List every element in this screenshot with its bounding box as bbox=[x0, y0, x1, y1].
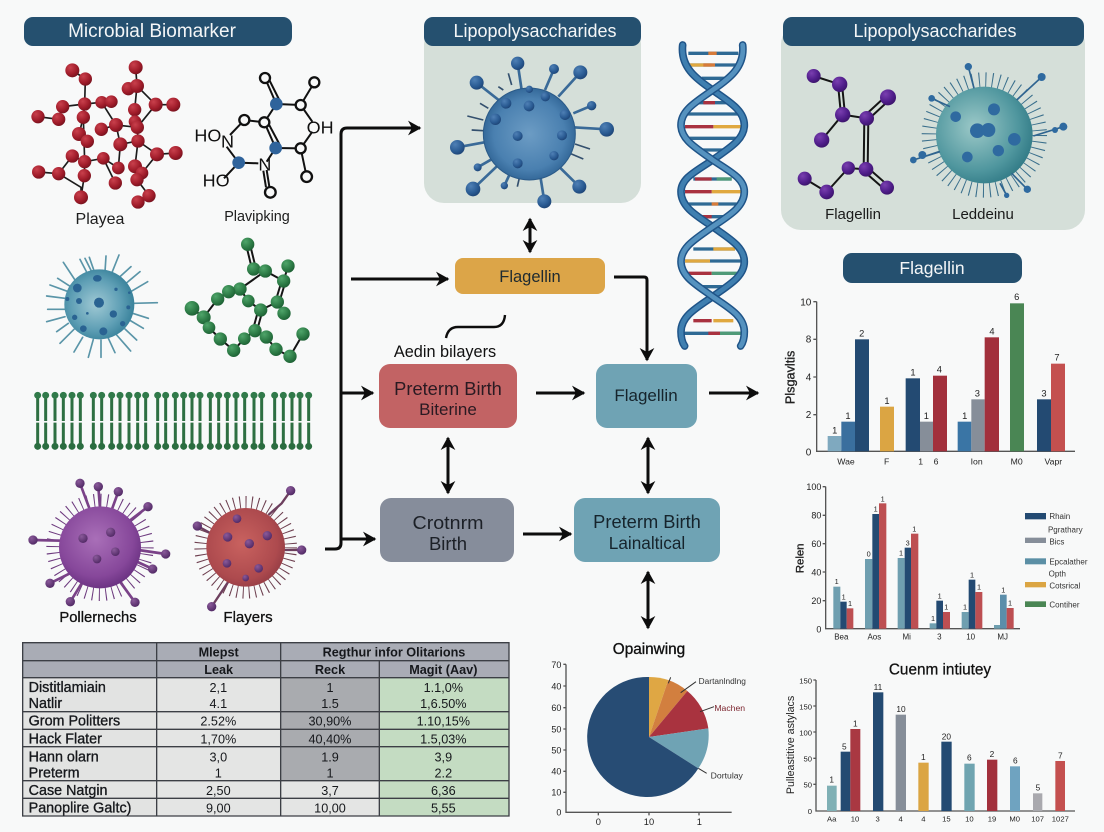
bracket: Aedin bilayers leader bbox=[446, 315, 505, 338]
flow box: Preterm Birth Lainaltical bbox=[574, 498, 720, 562]
label: Playea: Playea bbox=[76, 211, 125, 228]
bar chart: Relen: 1 bbox=[970, 570, 974, 579]
bar chart: Relen: 1 bbox=[944, 603, 948, 612]
data table: 3,7 bbox=[321, 784, 339, 798]
icon: teal microbe bbox=[47, 255, 157, 357]
bar chart: Flagellin: 4 bbox=[806, 372, 812, 383]
icon: chemical structure: N bbox=[258, 155, 271, 175]
flow box: Crotnrm Birth grey: Birth bbox=[429, 533, 467, 554]
arrow: double, panel to Flagellin bbox=[528, 219, 532, 252]
icon: purple molecule bbox=[798, 69, 896, 199]
pie chart: Opainwing: 50 bbox=[551, 724, 561, 734]
data table: Natlir bbox=[29, 696, 62, 712]
bar chart: Relen: 80 bbox=[811, 511, 821, 521]
bar chart: Relen: 1 bbox=[931, 614, 935, 623]
icon: red microbe bbox=[193, 486, 306, 611]
bar chart: Relen: 3 bbox=[937, 632, 942, 641]
icon: purple microbe bbox=[28, 479, 170, 607]
bar chart: Relen: Mi bbox=[902, 632, 911, 641]
bar chart: Flagellin: 4 bbox=[937, 365, 942, 375]
bar chart: Cuenm intiutey: 11 bbox=[874, 682, 883, 692]
flow box: Preterm Birth Lainaltical: Lainaltical bbox=[609, 533, 685, 553]
legend: Relen chart: Epcalather bbox=[1049, 557, 1088, 566]
data table: 6,36 bbox=[431, 784, 456, 798]
bar chart: Flagellin: 2 bbox=[859, 329, 864, 339]
bar chart: Cuenm intiutey: Cuenm intiutey bbox=[889, 662, 991, 679]
flow box: Flagellin teal: Flagellin bbox=[614, 386, 678, 405]
bar chart: Relen: Aos bbox=[867, 632, 881, 641]
legend: Relen chart: Contiher bbox=[1049, 600, 1080, 609]
bar chart: Relen: 20 bbox=[811, 596, 821, 606]
heading: right Lipopolysaccharides bbox=[783, 17, 1084, 46]
bar chart: Flagellin: Vapr bbox=[1045, 457, 1062, 467]
bar chart: Cuenm intiutey: 10 bbox=[896, 704, 906, 714]
data table: 30,90% bbox=[309, 714, 351, 728]
bar chart: Cuenm intiutey bbox=[785, 662, 1075, 823]
data table: 2,1 bbox=[210, 681, 227, 695]
bar chart: Flagellin: 6 bbox=[934, 457, 939, 467]
data table: 1 bbox=[326, 766, 334, 780]
label: Plavipking: Plavipking bbox=[224, 209, 290, 225]
data table: 40,40% bbox=[309, 732, 351, 746]
data table: 1.5 bbox=[321, 697, 339, 711]
bar chart: Cuenm intiutey: 10 bbox=[965, 814, 974, 823]
bar chart: Flagellin: F bbox=[884, 457, 889, 467]
data table: Distitlamiain bbox=[29, 680, 106, 696]
icon: chemical structure: HO bbox=[203, 171, 230, 191]
flow box: Preterm Birth red: Biterine bbox=[419, 400, 477, 419]
data table: 4.1 bbox=[210, 697, 227, 711]
bar chart: Relen: 100 bbox=[806, 482, 821, 492]
bar chart: Flagellin: 8 bbox=[806, 335, 812, 346]
bar chart: Cuenm intiutey: 100 bbox=[799, 728, 812, 737]
bar chart: Relen: Bea bbox=[834, 632, 849, 641]
bar chart: Flagellin: 2 bbox=[806, 410, 812, 421]
heading: Microbial Biomarker bbox=[24, 17, 292, 46]
bar chart: Flagellin: 1 bbox=[884, 396, 890, 406]
bar chart: Flagellin bbox=[784, 292, 1075, 467]
data table: 1.1,0% bbox=[424, 681, 463, 695]
pie chart: Opainwing: 60 bbox=[551, 703, 561, 713]
icon: DNA double helix bbox=[681, 45, 744, 346]
bar chart: Cuenm intiutey: 1 bbox=[829, 775, 834, 785]
bar chart: Relen: 40 bbox=[811, 567, 821, 577]
bar chart: Cuenm intiutey: Aa bbox=[827, 814, 837, 823]
pie chart: Opainwing: 70 bbox=[551, 660, 561, 670]
data table: Regthur infor Olitarions bbox=[323, 645, 465, 659]
bar chart: Flagellin: 6 bbox=[1014, 292, 1019, 302]
bar chart: Flagellin: Ion bbox=[971, 457, 983, 467]
label: Aedin bilayers: Aedin bilayers bbox=[394, 343, 496, 361]
bar chart: Relen: Relen bbox=[794, 544, 806, 573]
bar chart: Cuenm intiutey: 15 bbox=[942, 814, 951, 823]
data table: 3,9 bbox=[435, 750, 452, 764]
bar chart: Relen: 1 bbox=[899, 549, 903, 558]
bar chart: Relen: MJ bbox=[997, 632, 1008, 641]
icon: teal virus with hairs bbox=[910, 63, 1067, 198]
data table: 5,55 bbox=[431, 802, 456, 816]
legend: Relen chart: Pgrathary bbox=[1048, 525, 1083, 534]
bar chart: Cuenm intiutey: 5 bbox=[842, 741, 847, 751]
bar chart: Cuenm intiutey: 150 bbox=[799, 702, 812, 711]
flow box: Flagellin orange: Flagellin bbox=[499, 268, 561, 286]
data table: 1.5,03% bbox=[420, 732, 467, 746]
legend: Relen chart: Opth bbox=[1049, 569, 1066, 578]
bar chart: Relen: 1 bbox=[842, 592, 846, 601]
bar chart: Relen bbox=[794, 482, 1020, 641]
flow box: Crotnrm Birth grey: Crotnrm bbox=[412, 512, 484, 533]
pie chart: Opainwing: 40 bbox=[551, 681, 561, 691]
bar chart: Relen: 1 bbox=[977, 583, 981, 592]
bar chart: Cuenm intiutey: 6 bbox=[1013, 756, 1018, 766]
label: Flagellin (panel): Flagellin bbox=[825, 206, 881, 223]
bar chart: Flagellin: 1 bbox=[832, 425, 837, 435]
bar chart: Flagellin: 1 bbox=[910, 368, 916, 378]
bar chart: Cuenm intiutey: 4 bbox=[899, 814, 904, 823]
data table: Hack Flater bbox=[29, 731, 102, 747]
data table: 2.52% bbox=[200, 714, 236, 728]
bar chart: Cuenm intiutey: M0 bbox=[1009, 814, 1020, 823]
pie chart: Opainwing: Dortulay bbox=[711, 771, 744, 781]
legend: Relen chart: Rhain bbox=[1049, 512, 1070, 521]
data table: 1,6.50% bbox=[420, 697, 467, 711]
pie chart: Opainwing: 1 bbox=[697, 817, 702, 827]
bar chart: Flagellin: 0 bbox=[806, 447, 812, 458]
icon: chemical structure bbox=[194, 73, 334, 198]
flow box: Flagellin teal bbox=[596, 364, 697, 428]
heading: Flagellin chart: Flagellin bbox=[899, 258, 965, 278]
data table: Preterm bbox=[29, 765, 80, 781]
pie chart: Opainwing: 0 bbox=[596, 817, 601, 827]
bar chart: Relen: 1 bbox=[1001, 585, 1005, 594]
panel: centre Lipopolysaccharides bbox=[424, 17, 641, 203]
bar chart: Flagellin: Plsgavltis bbox=[784, 351, 798, 404]
bar chart: Relen: 3 bbox=[906, 538, 910, 547]
bar chart: Cuenm intiutey: 0 bbox=[808, 807, 812, 816]
arrow: double, teal boxes bbox=[646, 438, 650, 493]
bar chart: Relen: 1 bbox=[881, 494, 885, 503]
bar chart: Relen: 1 bbox=[912, 525, 916, 534]
bar chart: Relen: 0 bbox=[816, 624, 821, 634]
data table: 1,70% bbox=[200, 732, 236, 746]
arrow: grey box to teal box bbox=[523, 532, 571, 536]
bar chart: Cuenm intiutey: 1027 bbox=[1052, 814, 1069, 823]
data table: 10,00 bbox=[314, 802, 346, 816]
bar chart: Relen: 0 bbox=[867, 550, 871, 559]
bar chart: Cuenm intiutey: 150 bbox=[799, 676, 812, 685]
bar chart: Flagellin: 1 bbox=[918, 457, 923, 467]
label: Leddeinu: Leddeinu bbox=[952, 206, 1014, 223]
bar chart: Cuenm intiutey: 20 bbox=[942, 731, 951, 741]
data table: 1 bbox=[326, 681, 334, 695]
pie chart: Opainwing: 50 bbox=[551, 745, 561, 755]
arrow: double, red box to grey box bbox=[446, 438, 450, 493]
arrow: teal box to chart bbox=[709, 392, 758, 394]
data table: Leak bbox=[204, 663, 234, 677]
flow box: Crotnrm Birth grey bbox=[380, 498, 514, 562]
data table: 2.2 bbox=[435, 766, 452, 780]
arrow: to Crotnrm Birth bbox=[341, 538, 375, 540]
bar chart: Flagellin: 1 bbox=[924, 411, 929, 421]
bar chart: Flagellin: M0 bbox=[1011, 457, 1023, 467]
bar chart: Relen: 10 bbox=[966, 632, 976, 641]
heading: centre Lipopolysaccharides bbox=[424, 17, 641, 46]
data table: 3,0 bbox=[210, 750, 227, 764]
pie chart: Opainwing: 10 bbox=[644, 817, 654, 827]
icon: red molecule bbox=[31, 60, 183, 209]
icon: chemical structure: OH bbox=[307, 117, 334, 137]
icon: green molecule bbox=[185, 238, 310, 363]
flow box: Preterm Birth red: Preterm Birth bbox=[394, 378, 502, 399]
pie chart: Opainwing bbox=[551, 641, 746, 827]
panel: centre Lipopolysaccharides: Lipopolysaccharides bbox=[453, 21, 617, 41]
icon: lipid bilayer bbox=[38, 395, 309, 447]
bar chart: Relen: 1 bbox=[1008, 599, 1012, 608]
pie chart: Opainwing: Machen bbox=[714, 703, 745, 713]
bar chart: Flagellin: 3 bbox=[1041, 389, 1047, 399]
bar chart: Cuenm intiutey: 50 bbox=[803, 755, 812, 764]
arrow: to Flagellin orange bbox=[351, 278, 448, 280]
panel: right Lipopolysaccharides: Lipopolysaccharides bbox=[853, 21, 1017, 41]
icon: chemical structure: HO bbox=[194, 125, 221, 145]
heading: Microbial Biomarker: Microbial Biomarker bbox=[68, 21, 237, 42]
bar chart: Flagellin: 4 bbox=[989, 326, 995, 336]
pie chart: Opainwing: Dartanlndlng bbox=[699, 676, 746, 686]
data table: 2,50 bbox=[206, 784, 231, 798]
heading: Flagellin chart bbox=[843, 253, 1022, 283]
bar chart: Relen: 1 bbox=[835, 577, 839, 586]
bar chart: Flagellin: 7 bbox=[1054, 353, 1060, 363]
legend: Relen chart: Cotsrical bbox=[1049, 582, 1081, 591]
bar chart: Cuenm intiutey: 2 bbox=[990, 749, 995, 759]
arrow: double, to pie chart bbox=[646, 572, 650, 628]
bar chart: Relen: 1 bbox=[963, 603, 967, 612]
data table: Magit (Aav) bbox=[409, 663, 477, 677]
pie chart: Opainwing: Opainwing bbox=[613, 641, 685, 658]
data table: Mlepst bbox=[199, 645, 239, 659]
bar chart: Cuenm intiutey: 107 bbox=[1031, 814, 1044, 823]
data table: 9,00 bbox=[206, 802, 231, 816]
bar chart: Relen: 1 bbox=[874, 505, 878, 514]
bar chart: Cuenm intiutey: 5 bbox=[1036, 783, 1041, 793]
flow box: Preterm Birth red bbox=[379, 364, 517, 428]
bar chart: Cuenm intiutey: 1 bbox=[921, 752, 926, 762]
bar chart: Cuenm intiutey: 6 bbox=[967, 753, 972, 763]
data table: Reck bbox=[315, 663, 346, 677]
bar chart: Cuenm intiutey: 7 bbox=[1058, 750, 1063, 760]
arrow: main bracket bbox=[325, 128, 420, 549]
arrow: Flagellin orange to Flagellin teal bbox=[614, 277, 647, 360]
bar chart: Cuenm intiutey: 4 bbox=[921, 814, 926, 823]
bar chart: Cuenm intiutey: 3 bbox=[876, 814, 880, 823]
bar chart: Cuenm intiutey: 50 bbox=[803, 781, 812, 790]
panel: right Lipopolysaccharides bbox=[781, 17, 1085, 230]
data table: Hann olarn bbox=[29, 749, 99, 765]
bar chart: Relen: 1 bbox=[938, 591, 942, 600]
pie chart: Opainwing: 10 bbox=[551, 788, 561, 798]
bar chart: Cuenm intiutey: 10 bbox=[851, 814, 859, 823]
label: Flayers: Flayers bbox=[223, 609, 273, 626]
bar chart: Relen: 60 bbox=[811, 539, 821, 549]
legend: Relen chart bbox=[1025, 512, 1088, 609]
data table: Panoplire Galtc) bbox=[29, 801, 131, 817]
icon: chemical structure: N bbox=[221, 131, 234, 151]
arrow: to Preterm Birth red box bbox=[341, 392, 373, 394]
icon: blue virus bbox=[450, 57, 614, 208]
bar chart: Cuenm intiutey: 1 bbox=[853, 718, 858, 728]
data table: Grom Politters bbox=[29, 713, 120, 729]
legend: Relen chart: Bics bbox=[1049, 538, 1064, 547]
pie chart: Opainwing: 0 bbox=[556, 808, 561, 818]
pie chart: Opainwing: 40 bbox=[551, 767, 561, 777]
bar chart: Flagellin: 1 bbox=[845, 411, 851, 421]
bar chart: Flagellin: Wae bbox=[837, 457, 855, 467]
bar chart: Cuenm intiutey: 19 bbox=[988, 814, 996, 823]
bar chart: Flagellin: 1 bbox=[962, 411, 967, 421]
bar chart: Flagellin: 3 bbox=[975, 389, 980, 399]
data table: 1.9 bbox=[321, 750, 339, 764]
bar chart: Relen: 1 bbox=[848, 599, 852, 608]
data table: 1.10,15% bbox=[417, 714, 470, 728]
data table bbox=[23, 643, 509, 817]
bar chart: Flagellin: 10 bbox=[800, 297, 812, 308]
data table: Case Natgin bbox=[29, 783, 108, 799]
arrow: red box to teal box bbox=[536, 392, 584, 394]
label: Pollernechs: Pollernechs bbox=[59, 610, 137, 626]
bar chart: Cuenm intiutey: Pulleastitive astylacs bbox=[785, 696, 797, 794]
flow box: Flagellin orange bbox=[455, 258, 605, 294]
data table: 1 bbox=[215, 766, 222, 780]
flow box: Preterm Birth Lainaltical: Preterm Birth bbox=[593, 511, 701, 532]
